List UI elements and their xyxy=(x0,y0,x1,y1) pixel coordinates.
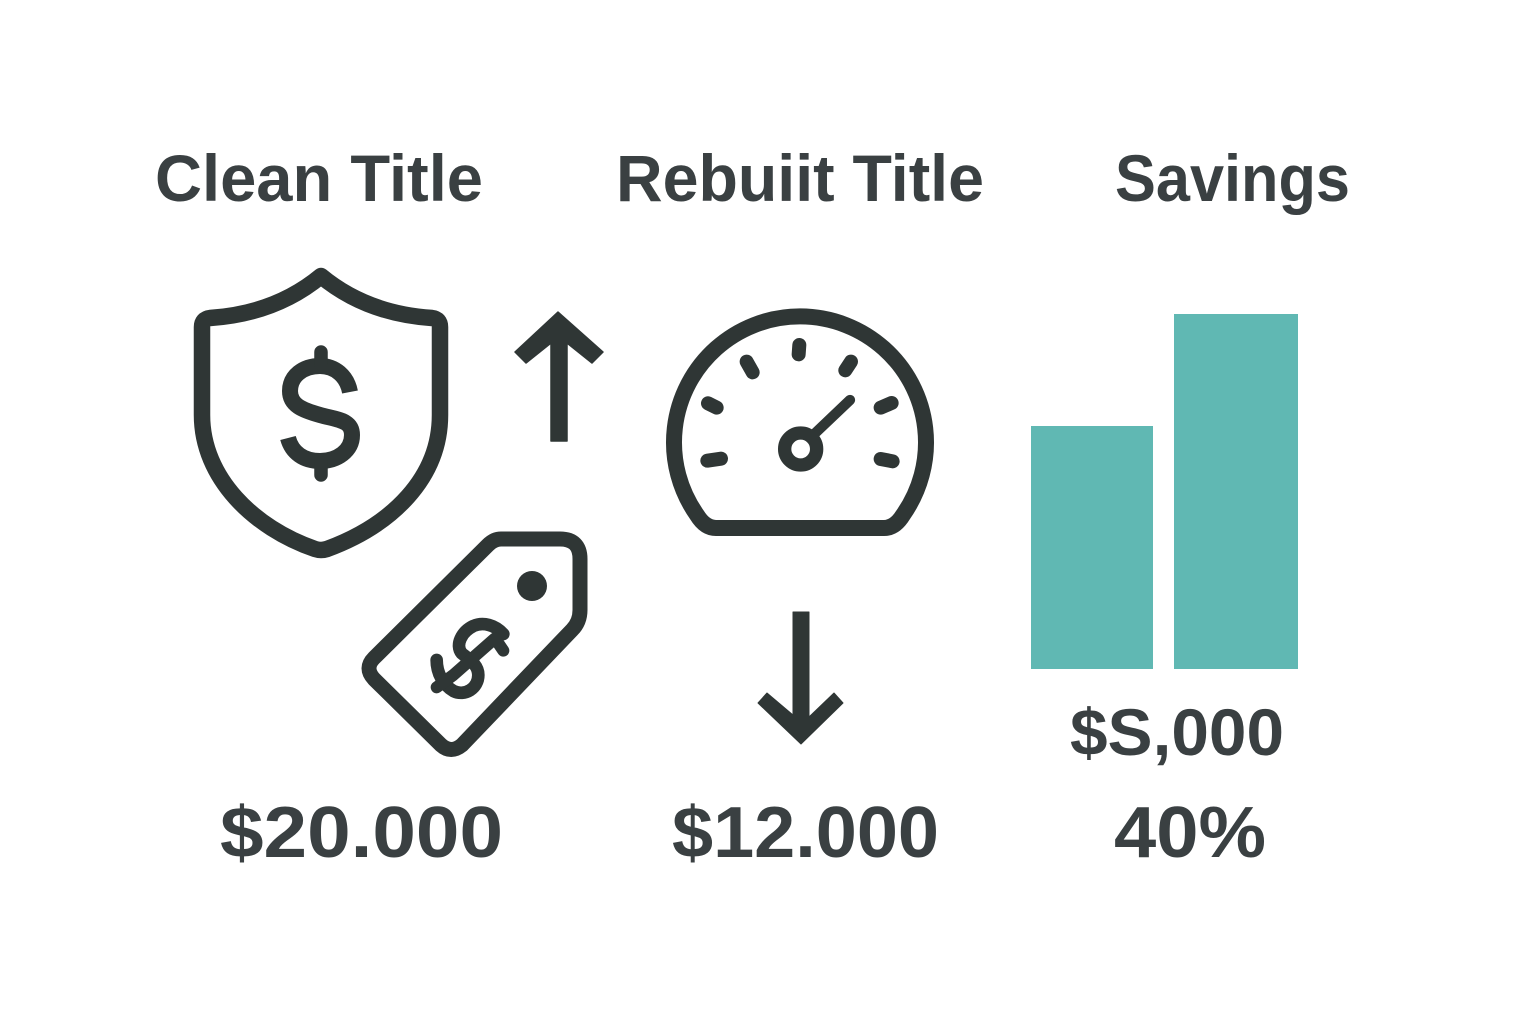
heading: Savings: Savings xyxy=(1115,141,1350,215)
value: clean title price: $20.000 xyxy=(220,793,503,873)
icon: speedometer gauge xyxy=(674,316,926,528)
arrow: up xyxy=(515,312,603,441)
bar chart: savings xyxy=(1031,314,1298,669)
arrow: down xyxy=(758,612,843,744)
icon: price tag with dollar sign xyxy=(369,539,580,750)
value: savings amount: $S,000 xyxy=(1070,695,1284,769)
heading: Rebuiit Title: Rebuiit Title xyxy=(616,141,984,215)
heading: Clean Title: Clean Title xyxy=(155,141,483,215)
value: savings percent: 40% xyxy=(1114,793,1266,873)
value: rebuilt title price: $12.000 xyxy=(672,793,939,873)
icon: shield with dollar sign xyxy=(202,276,440,550)
